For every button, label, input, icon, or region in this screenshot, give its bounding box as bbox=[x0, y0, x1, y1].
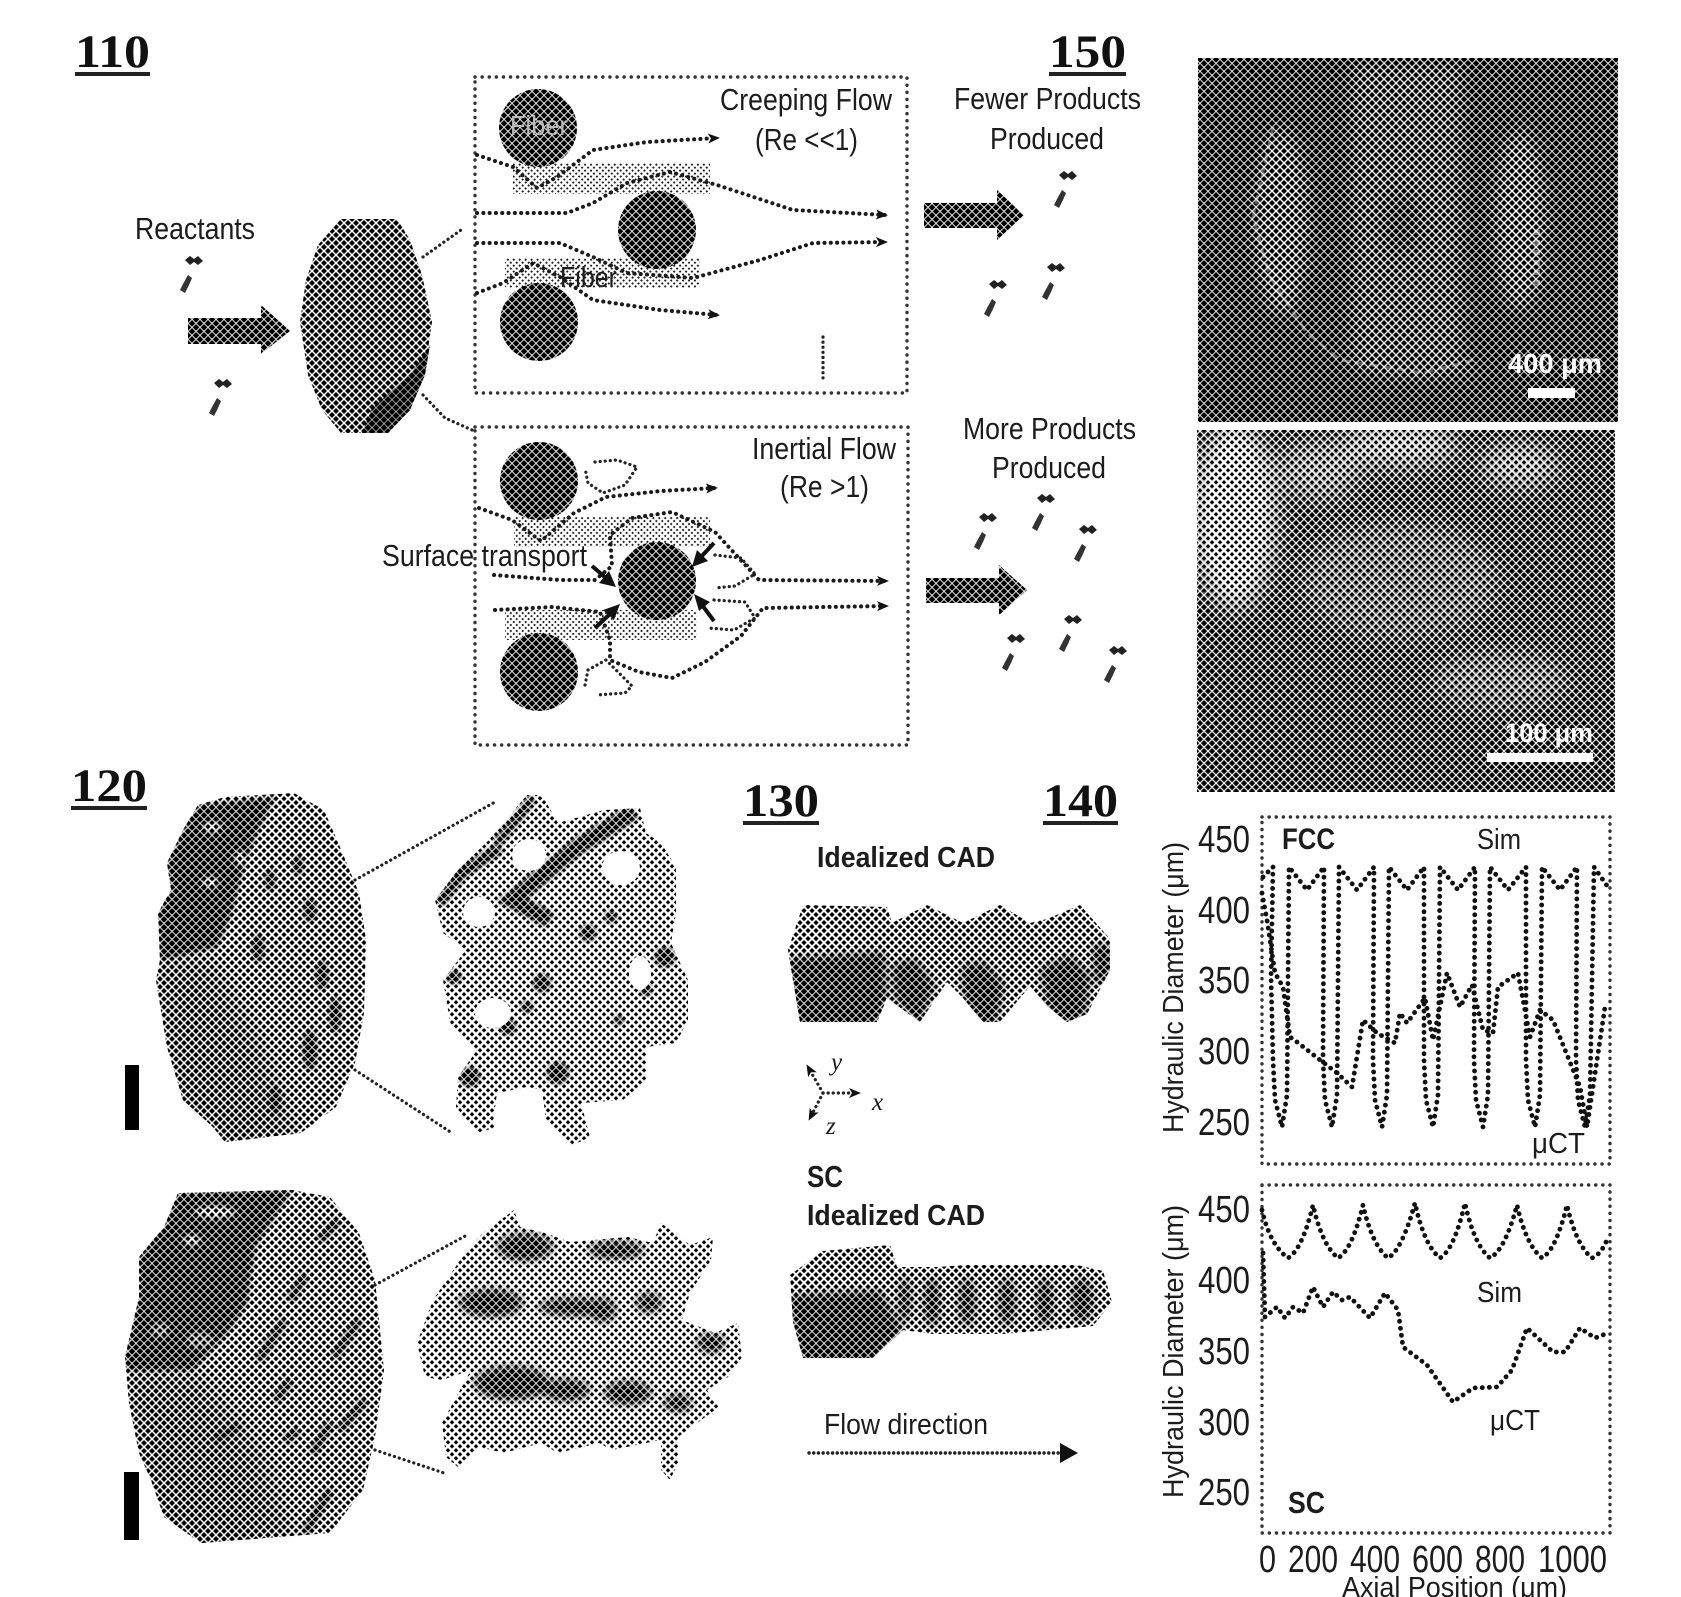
fiber circle middle bbox=[618, 542, 696, 620]
label: More Products Produced bbox=[963, 411, 1136, 485]
photo: SEM lattice overview bbox=[1198, 58, 1618, 422]
scale bar 400 um bbox=[1528, 388, 1575, 398]
scale text 400 um: 400 μm bbox=[1508, 348, 1602, 379]
fiber circle bottom bbox=[500, 633, 578, 711]
image: FCC lattice CT scan disk bbox=[156, 793, 366, 1142]
chart: FCC hydraulic diameter bbox=[1158, 817, 1610, 1164]
label: Idealized CAD SC: Idealized CAD bbox=[807, 1200, 985, 1232]
icon: fewer product molecules bbox=[984, 171, 1077, 317]
streamline c bbox=[477, 242, 885, 278]
y axis ticks: 400 bbox=[1198, 1260, 1250, 1302]
y axis ticks: 400 bbox=[1198, 890, 1250, 932]
gray band upper bbox=[514, 517, 710, 547]
x axis ticks bbox=[1259, 1539, 1607, 1581]
y axis ticks: 250 bbox=[1198, 1472, 1250, 1514]
scale bar top bbox=[125, 1065, 139, 1130]
icon: xyz axes: z bbox=[825, 1113, 836, 1140]
icon: xyz axes: y bbox=[828, 1049, 843, 1076]
streamline top bbox=[479, 488, 715, 541]
y axis ticks bbox=[1198, 1189, 1250, 1514]
label: Sim: Sim bbox=[1477, 824, 1521, 856]
connector: cylinder to inertial flow bbox=[423, 395, 472, 430]
icon: more product molecules bbox=[974, 494, 1127, 683]
x axis ticks: 1000 bbox=[1538, 1539, 1607, 1581]
scale bar 100 um bbox=[1487, 753, 1593, 762]
icon: xyz axes bbox=[808, 1049, 883, 1140]
panel: creeping flow bbox=[475, 77, 907, 393]
x axis ticks: 800 bbox=[1475, 1539, 1525, 1581]
label: Sim: Sim bbox=[1477, 1277, 1522, 1309]
icon: xyz axes: x bbox=[871, 1089, 883, 1116]
connector lower bbox=[375, 1450, 444, 1473]
arrow: surface transport left bbox=[592, 566, 616, 587]
streamline middle lower bbox=[495, 606, 886, 678]
streamline a bbox=[477, 138, 717, 188]
label: Fewer Products Produced: Fewer Products bbox=[954, 81, 1141, 116]
label: microCT: μCT bbox=[1490, 1405, 1540, 1437]
arrow: flow direction bbox=[809, 1443, 1078, 1463]
icon: lattice cylinder bbox=[300, 219, 432, 433]
tick mark bbox=[821, 337, 825, 380]
arrow: surface transport lower right bbox=[694, 594, 714, 621]
section number 150: 150 bbox=[1049, 26, 1126, 78]
y axis ticks: 300 bbox=[1198, 1031, 1250, 1073]
connector upper bbox=[355, 802, 495, 880]
y axis ticks bbox=[1198, 819, 1250, 1144]
scale text 100 um: 100 μm bbox=[1505, 718, 1593, 748]
section number 120: 120 bbox=[71, 760, 147, 812]
label: FCC: FCC bbox=[1282, 823, 1335, 856]
label: Fewer Products Produced bbox=[954, 81, 1141, 156]
arrow: surface transport upper right bbox=[692, 543, 714, 567]
x axis ticks: 400 bbox=[1350, 1539, 1400, 1581]
streamline d bbox=[477, 263, 717, 315]
image: FCC lattice magnified bbox=[435, 795, 688, 1144]
scale bar bottom bbox=[124, 1472, 139, 1540]
arrow: to fewer products bbox=[924, 190, 1024, 240]
label: More Products Produced: Produced bbox=[992, 450, 1106, 485]
arrow: to more products bbox=[926, 565, 1027, 615]
connector upper bbox=[375, 1235, 467, 1285]
connector lower bbox=[355, 1070, 452, 1133]
plot frame bbox=[1262, 817, 1610, 1164]
y axis ticks: 300 bbox=[1198, 1402, 1250, 1444]
streamline b bbox=[477, 172, 885, 215]
x axis ticks: 200 bbox=[1288, 1539, 1338, 1581]
label: microCT: μCT bbox=[1532, 1128, 1585, 1160]
model: SC CAD bbox=[790, 1245, 1112, 1358]
streamline middle upper bbox=[494, 512, 886, 581]
icon: reactant molecule lower bbox=[209, 379, 232, 416]
connector: cylinder to creeping flow bbox=[423, 230, 461, 257]
y axis title: Hydraulic Diameter (μm) bbox=[1158, 1205, 1190, 1498]
image: SC lattice magnified bbox=[418, 1210, 742, 1480]
label: SC: SC bbox=[807, 1159, 843, 1194]
title: Inertial Flow: Inertial Flow bbox=[752, 431, 897, 466]
fiber circle top bbox=[500, 442, 578, 520]
label: Fewer Products Produced: Produced bbox=[990, 121, 1104, 156]
section number 140: 140 bbox=[1043, 775, 1118, 827]
label: Reactants: Reactants bbox=[135, 211, 255, 246]
chart: SC hydraulic diameter bbox=[1158, 1185, 1610, 1597]
gray band upper bbox=[513, 163, 710, 194]
icon: reactant molecule upper bbox=[180, 256, 203, 293]
series: microCT bbox=[1263, 1253, 1608, 1402]
model: FCC CAD bbox=[788, 905, 1110, 1022]
recirculation loop top bbox=[585, 460, 637, 493]
section number 110: 110 bbox=[75, 26, 150, 78]
y axis ticks: 350 bbox=[1198, 960, 1250, 1002]
recirculation loop behind upper bbox=[715, 555, 755, 588]
label: white Fiber: Fiber bbox=[510, 110, 568, 141]
series: Sim bbox=[1262, 1203, 1608, 1258]
y axis ticks: 450 bbox=[1198, 819, 1250, 861]
y axis ticks: 250 bbox=[1198, 1102, 1250, 1144]
label: Flow direction: Flow direction bbox=[824, 1409, 988, 1441]
arrow: reactants into lattice bbox=[188, 305, 290, 354]
label: SC: SC bbox=[1288, 1485, 1325, 1520]
recirculation loop bottom bbox=[585, 660, 632, 695]
fiber circle top bbox=[499, 89, 577, 167]
y axis ticks: 350 bbox=[1198, 1331, 1250, 1373]
label: More Products Produced: More Products bbox=[963, 411, 1136, 446]
x axis ticks: 0 bbox=[1259, 1539, 1276, 1581]
series: microCT bbox=[1262, 893, 1605, 1127]
photo: SEM lattice close-up bbox=[1197, 430, 1615, 792]
subtitle: Re much less than 1: (Re <<1) bbox=[755, 122, 858, 157]
y axis ticks: 450 bbox=[1198, 1189, 1250, 1231]
fiber circle bottom bbox=[500, 283, 578, 361]
gray band lower bbox=[505, 258, 700, 288]
gray band lower bbox=[505, 610, 697, 640]
arrow: surface transport lower left bbox=[595, 604, 620, 628]
label: Fiber: Fiber bbox=[560, 262, 617, 294]
label: Surface transport: Surface transport bbox=[382, 538, 587, 573]
subtitle: Re greater than 1: (Re >1) bbox=[780, 469, 869, 504]
x axis ticks: 600 bbox=[1412, 1539, 1463, 1581]
fiber circle middle bbox=[618, 191, 696, 269]
series: Sim bbox=[1263, 867, 1610, 1127]
label: Idealized CAD FCC: Idealized CAD bbox=[817, 842, 995, 874]
image: SC lattice CT scan disk bbox=[125, 1190, 384, 1543]
section number 130: 130 bbox=[743, 775, 819, 827]
recirculation loop behind lower bbox=[708, 600, 755, 630]
title: Creeping Flow: Creeping Flow bbox=[720, 82, 893, 117]
panel: inertial flow bbox=[475, 427, 908, 745]
plot frame bbox=[1262, 1185, 1610, 1533]
y axis title: Hydraulic Diameter (μm) bbox=[1158, 842, 1190, 1133]
